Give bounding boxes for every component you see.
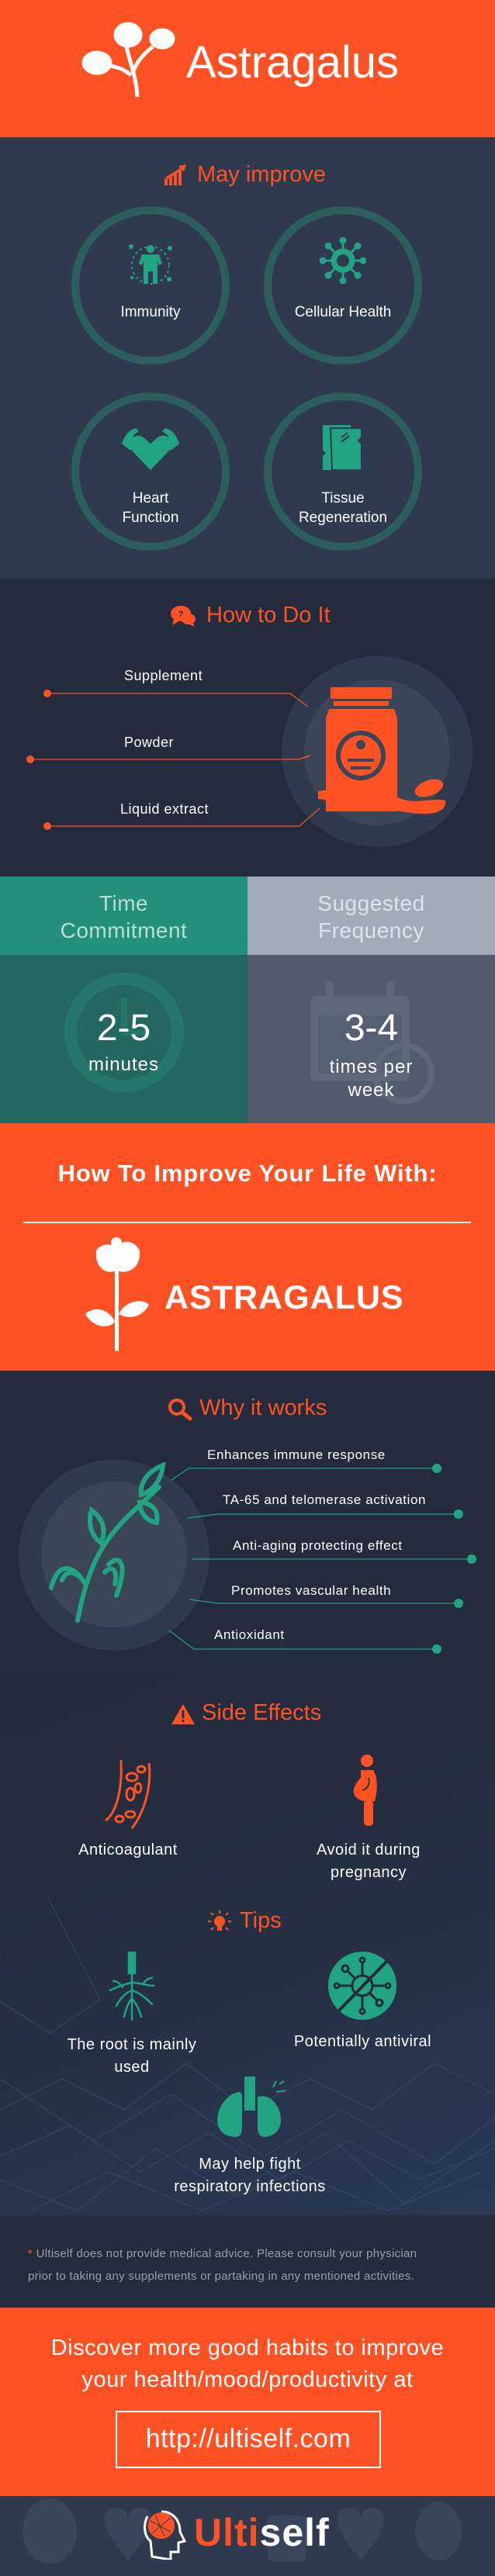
panel: suggested frequency — [248, 877, 495, 1123]
label: liquid extract: Liquid extract — [120, 801, 209, 817]
circle: heart function: Heart — [133, 490, 168, 507]
item: anticoagulant — [78, 1759, 178, 1859]
label: supplement: Supplement — [124, 668, 202, 683]
panel: time commitment: minutes — [88, 1054, 159, 1075]
header: suggested frequency: Frequency — [318, 918, 424, 942]
icon: immunity — [129, 244, 172, 285]
value: 3-4 times per week: 3-4 — [344, 1008, 398, 1049]
circle: immunity: Immunity — [120, 304, 181, 320]
circle: cellular health: Cellular Health — [295, 304, 391, 320]
icon: blood vessel — [105, 1759, 151, 1829]
circle: cellular health — [264, 206, 422, 365]
item: antiviral — [294, 1952, 431, 2050]
text: reasons: Enhances immune response — [207, 1447, 386, 1462]
icon: calendar — [310, 980, 434, 1105]
diagram: forms — [26, 656, 472, 847]
text: discover more — [51, 2336, 444, 2392]
header: time commitment — [0, 877, 248, 955]
text: discover more: your health/mood/productivity at — [81, 2367, 414, 2392]
icon: root — [109, 1952, 155, 2021]
circle: tissue regeneration — [264, 392, 422, 551]
heading: tips: Tips — [240, 1908, 282, 1933]
circle: immunity — [71, 206, 230, 365]
circle: heart function: Function — [123, 510, 178, 526]
heading: how to improve your life with: How To Improve Your Life With: — [58, 1160, 437, 1187]
header: time commitment: Commitment — [61, 918, 187, 942]
diagram: reasons — [19, 1460, 476, 1654]
item: respiratory — [174, 2076, 326, 2195]
disclaimer — [0, 2215, 495, 2308]
item: root: used — [114, 2059, 150, 2076]
link box — [116, 2411, 381, 2468]
icon: strong heart — [122, 428, 179, 470]
background faint icons — [22, 2498, 462, 2564]
text: discover more: Discover more good habits to improve — [51, 2336, 444, 2360]
panel: why it works — [0, 1371, 495, 1675]
background network — [0, 1896, 495, 2211]
header: suggested frequency: Suggested — [317, 891, 425, 915]
footer call to action — [0, 2308, 495, 2496]
item: respiratory: respiratory infections — [174, 2178, 326, 2195]
panel: why it works: Antioxidant — [214, 1627, 285, 1642]
panel: side effects and tips — [0, 1675, 495, 2215]
circle: heart function — [71, 392, 230, 551]
item: pregnancy — [317, 1755, 421, 1881]
circle: tissue regeneration: Regeneration — [299, 510, 387, 526]
title: Astragalus — [186, 37, 399, 88]
heading: how to do it: How to Do It — [206, 603, 331, 628]
icon: cell — [320, 237, 366, 284]
header — [0, 0, 495, 137]
logo: ultiself: Ultiself — [194, 2511, 330, 2554]
footer logo bar — [0, 2496, 495, 2576]
heading: how to do it: ? — [178, 610, 184, 619]
item: anticoagulant: Anticoagulant — [78, 1841, 178, 1859]
panel: suggested frequency: week — [348, 1080, 395, 1101]
panel: why it works: TA-65 and telomerase activation — [223, 1492, 426, 1507]
header: suggested frequency — [248, 877, 495, 955]
icon: jar and spoon — [318, 687, 445, 814]
item: pregnancy: Avoid it during — [317, 1841, 421, 1859]
banner: how to improve — [0, 1123, 495, 1371]
heading: side effects: Side Effects — [202, 1700, 321, 1725]
item: respiratory: May help fight — [199, 2156, 301, 2173]
title: ASTRAGALUS: ASTRAGALUS — [164, 1279, 404, 1316]
icon: clock — [64, 973, 184, 1092]
icon: antiviral — [328, 1952, 396, 2020]
panel: may improve — [0, 137, 495, 579]
item: root — [68, 1952, 196, 2076]
item: root: The root is mainly — [68, 2036, 196, 2053]
icon: astragalus pods — [82, 22, 175, 97]
panel: how to do it — [0, 579, 495, 877]
panel: why it works: Promotes vascular health — [231, 1583, 391, 1598]
heading: why it works: Why it works — [199, 1395, 327, 1420]
circle: tissue regeneration: Tissue — [321, 490, 365, 507]
panel: suggested frequency: times per — [330, 1056, 413, 1077]
icon: plant — [51, 1465, 163, 1620]
icon: lungs — [217, 2076, 286, 2137]
icon: pregnant woman — [354, 1755, 377, 1826]
icon: flower — [85, 1237, 149, 1351]
value: 2-5 minutes: 2-5 — [97, 1008, 151, 1049]
disclaimer: * Ultiself does not provide medical advice. Please consult your physician — [28, 2247, 417, 2260]
label: powder: Powder — [124, 735, 174, 750]
heading: tips — [208, 1908, 282, 1933]
icon: tissue — [323, 425, 361, 470]
item: pregnancy: pregnancy — [331, 1864, 407, 1881]
panel: why it works: Anti-aging protecting effect — [233, 1538, 403, 1553]
item: antiviral: Potentially antiviral — [294, 2033, 431, 2050]
header: time commitment: Time — [99, 891, 148, 915]
heading: may improve: May improve — [197, 162, 326, 187]
panel: time commitment — [0, 877, 248, 1123]
logo: ultiself — [144, 2510, 330, 2560]
link box: http://ultiself.com — [146, 2424, 351, 2453]
disclaimer: prior to taking any supplements or partaking in any mentioned activities. — [28, 2270, 414, 2283]
